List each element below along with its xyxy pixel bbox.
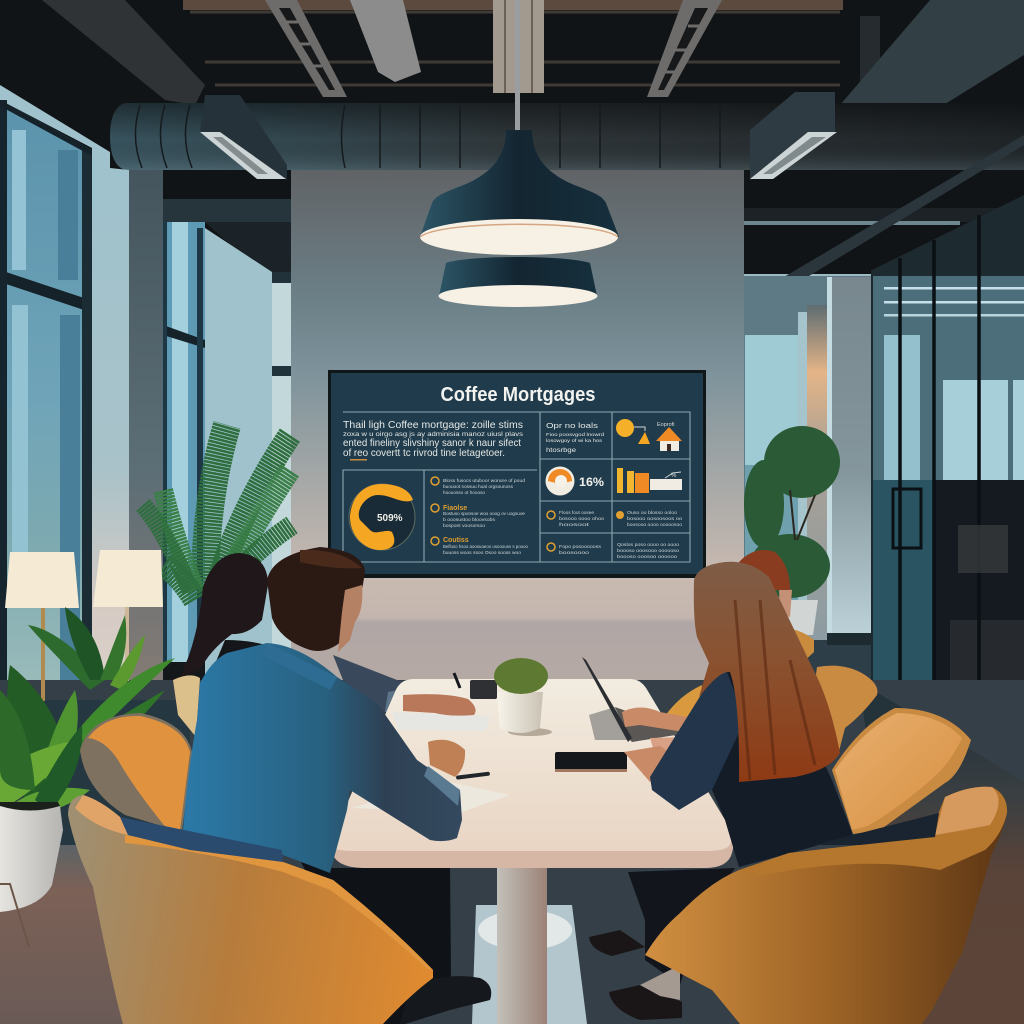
vent: right <box>750 92 837 180</box>
laptop <box>582 657 688 742</box>
table top <box>331 679 733 868</box>
left list items: hoouosso ot hoooso <box>443 490 486 495</box>
left hand on table <box>403 694 476 716</box>
pendant lamp: large <box>420 0 619 255</box>
mid row lists: hoosoot <box>559 522 590 527</box>
floor: warm carpet right <box>860 682 1024 1024</box>
woman right: hands <box>622 708 692 782</box>
screen intro text: of reo covertt tc rivrod tine letagetoer. <box>343 447 505 459</box>
man: trousers <box>300 860 451 1024</box>
woman back right <box>739 550 792 617</box>
mid row lists: boooso ooosoo oooooo <box>617 554 678 559</box>
man: shoe <box>400 976 491 1024</box>
floor: warm carpet left <box>0 845 140 1024</box>
bar chart: % <box>671 473 677 479</box>
mid row lists: boooso ooosooo oooooso <box>617 548 680 553</box>
pendant lamp: small <box>438 257 598 307</box>
mid row lists <box>547 510 683 559</box>
screen intro text: zoxa w u oirgo asg js ay adminisia manoz uiusl plavs <box>343 431 524 438</box>
duct: main horizontal <box>110 103 1024 170</box>
chair: small left behind <box>173 675 200 737</box>
left list items <box>431 477 528 555</box>
panel: top middle text: losowgoy of wi ka hos <box>546 438 603 443</box>
table leg and base <box>472 866 587 1024</box>
tablet <box>555 752 627 772</box>
floor: centre carpet <box>0 680 1024 1024</box>
glass partition <box>870 195 1024 782</box>
icon: sun lamp house: Eoprofi <box>657 422 674 428</box>
mid row lists: Fopo posoooooss <box>559 544 602 549</box>
woman right: hair <box>694 562 840 782</box>
left list items: Belfuso hsoo aoosuoeoo usooouss s poooo <box>443 544 528 549</box>
floor lamp: right <box>93 550 163 681</box>
mid row lists: boosooo oooo ooooosoo <box>627 522 683 527</box>
chair: right second <box>832 708 971 834</box>
left windows and walls <box>0 85 291 715</box>
vent: left <box>200 95 287 180</box>
mid row lists: bosooo oooo ohoo <box>559 516 605 521</box>
left list items: buuoss woos ssoo Osoo sooss woo <box>443 550 522 555</box>
stool leg at far left <box>0 884 29 947</box>
woman right: body <box>712 667 853 867</box>
bar chart <box>617 468 682 493</box>
screen intro text <box>343 419 524 459</box>
left list items: Bostuso sponsoe woo ooog ov uogsuoe <box>443 511 526 516</box>
mid row lists: bosooo oosoosoos oo <box>627 516 683 521</box>
centre wall <box>291 170 744 690</box>
chair: front right <box>645 787 1007 1024</box>
woman left: dark hair, denim sleeve <box>180 553 415 714</box>
man: shirt, hair, hand <box>183 547 465 873</box>
fern plant behind people <box>143 425 292 600</box>
woman right: sandals <box>589 930 682 1020</box>
left list items: Fiaolse <box>443 505 467 512</box>
woman right: trousers <box>628 868 735 985</box>
left list items: buouoot sossuu hoal orgsounoss <box>443 484 514 489</box>
chair: front left <box>68 795 433 1024</box>
tree: right behind people <box>744 426 840 635</box>
woman right: ankle <box>640 965 680 1000</box>
chair: right third <box>810 666 878 755</box>
TV screen infographic <box>328 370 706 578</box>
panel: top middle text: Fioo poosvgod lnowrd <box>546 432 605 437</box>
icon: pie badge and 16 percent: 16% <box>579 475 604 489</box>
floor lamp: left <box>5 552 79 701</box>
ceiling <box>0 0 1024 340</box>
screen title: Coffee Mortgages <box>440 384 596 406</box>
potted plant: left foreground <box>0 607 175 912</box>
left list items: b ooosustoo bloovsobs <box>443 517 496 522</box>
icon: pie badge and 16 percent <box>546 466 604 496</box>
panel: top middle text: htosrbge <box>546 447 576 454</box>
duct: upper centre <box>350 0 421 82</box>
screen intro text: ented fineliny slivshiny sanor k naur sifect <box>343 437 521 449</box>
screen intro text: Thail ligh Coffee mortgage: zoille stims <box>343 419 523 431</box>
donut chart: 509% <box>377 513 403 524</box>
mid row lists: Floos foot oosee <box>559 510 595 515</box>
mid row lists: Qoslos poso oooo oo oooo <box>617 542 680 547</box>
table plant <box>494 658 552 736</box>
left list items: Bloss fusocs utuboor wonore of poud <box>443 478 526 483</box>
panel: top middle text: Opr no loals <box>546 421 598 430</box>
ladder beam: left <box>265 0 347 97</box>
chair: left second <box>80 713 192 832</box>
donut chart <box>349 484 415 550</box>
chairs: far right <box>665 628 814 718</box>
mid row lists: Ouso oo blosso ooloo <box>627 510 678 515</box>
table items: notebook and phone <box>352 673 510 812</box>
panel: top middle text <box>546 421 605 454</box>
woman right: sleeve <box>650 667 745 810</box>
left list items: Coutiss <box>443 537 469 544</box>
mid row lists: boosoooo <box>559 550 590 555</box>
icon: sun lamp house <box>616 419 682 451</box>
left list items: bospont voosorsoo <box>443 523 486 528</box>
beams below duct <box>163 135 1024 314</box>
duct: upper right vertical <box>860 16 880 96</box>
floor: left dark teal behind plant <box>0 700 190 850</box>
duct: upper right flexible <box>840 0 1024 140</box>
ladder beam: right <box>647 0 722 97</box>
screen grid lines <box>343 412 690 562</box>
duct: upper left flexible <box>42 0 205 105</box>
right background room <box>744 276 874 690</box>
